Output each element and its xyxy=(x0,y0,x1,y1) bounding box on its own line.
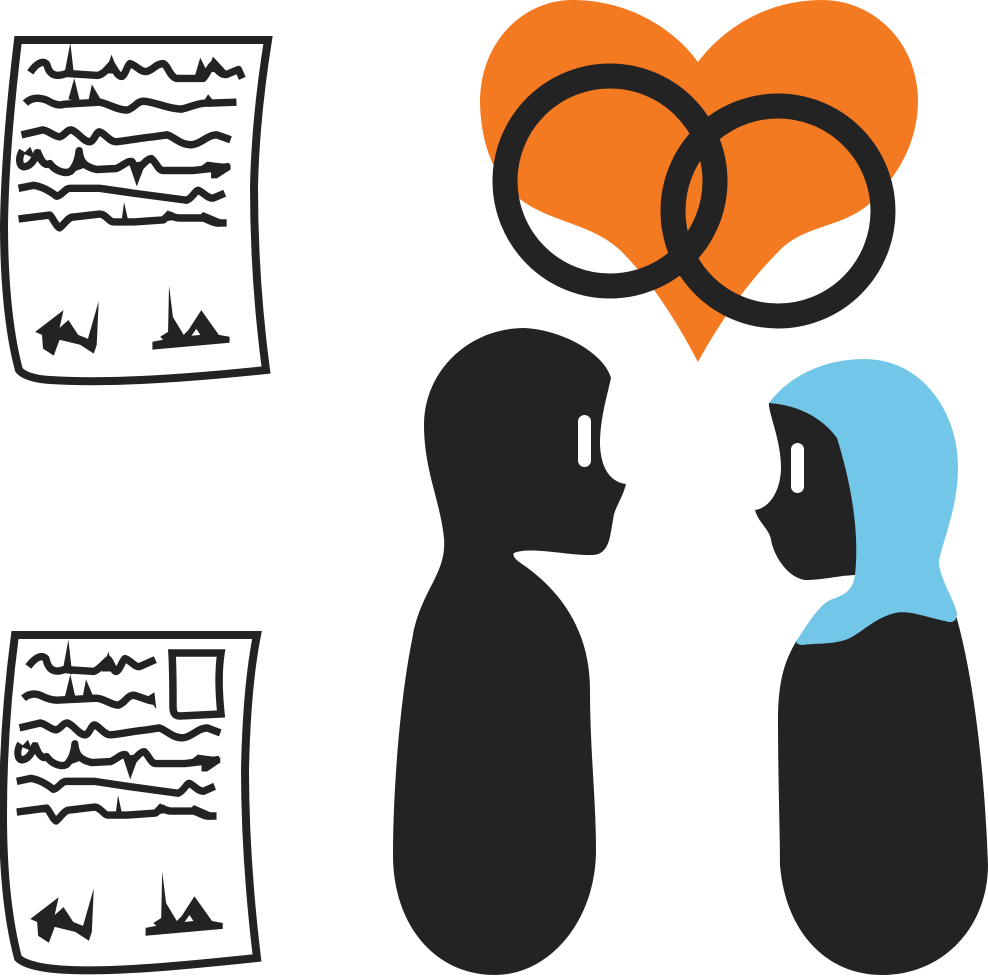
icon: document one xyxy=(4,40,268,381)
figure: man silhouette xyxy=(393,328,626,975)
icon: document two with photo xyxy=(3,635,257,970)
icon: signature left xyxy=(35,301,99,356)
headscarf xyxy=(769,359,958,645)
icon: woman eye xyxy=(791,443,804,493)
icon: orange heart xyxy=(480,0,918,362)
face xyxy=(755,400,860,580)
icon: interlocked wedding rings xyxy=(505,76,883,316)
icon: photo frame xyxy=(172,653,221,716)
figure: woman silhouette xyxy=(755,359,988,975)
body xyxy=(778,600,988,975)
icon: man eye xyxy=(578,415,591,467)
icon: signature right xyxy=(152,285,230,350)
